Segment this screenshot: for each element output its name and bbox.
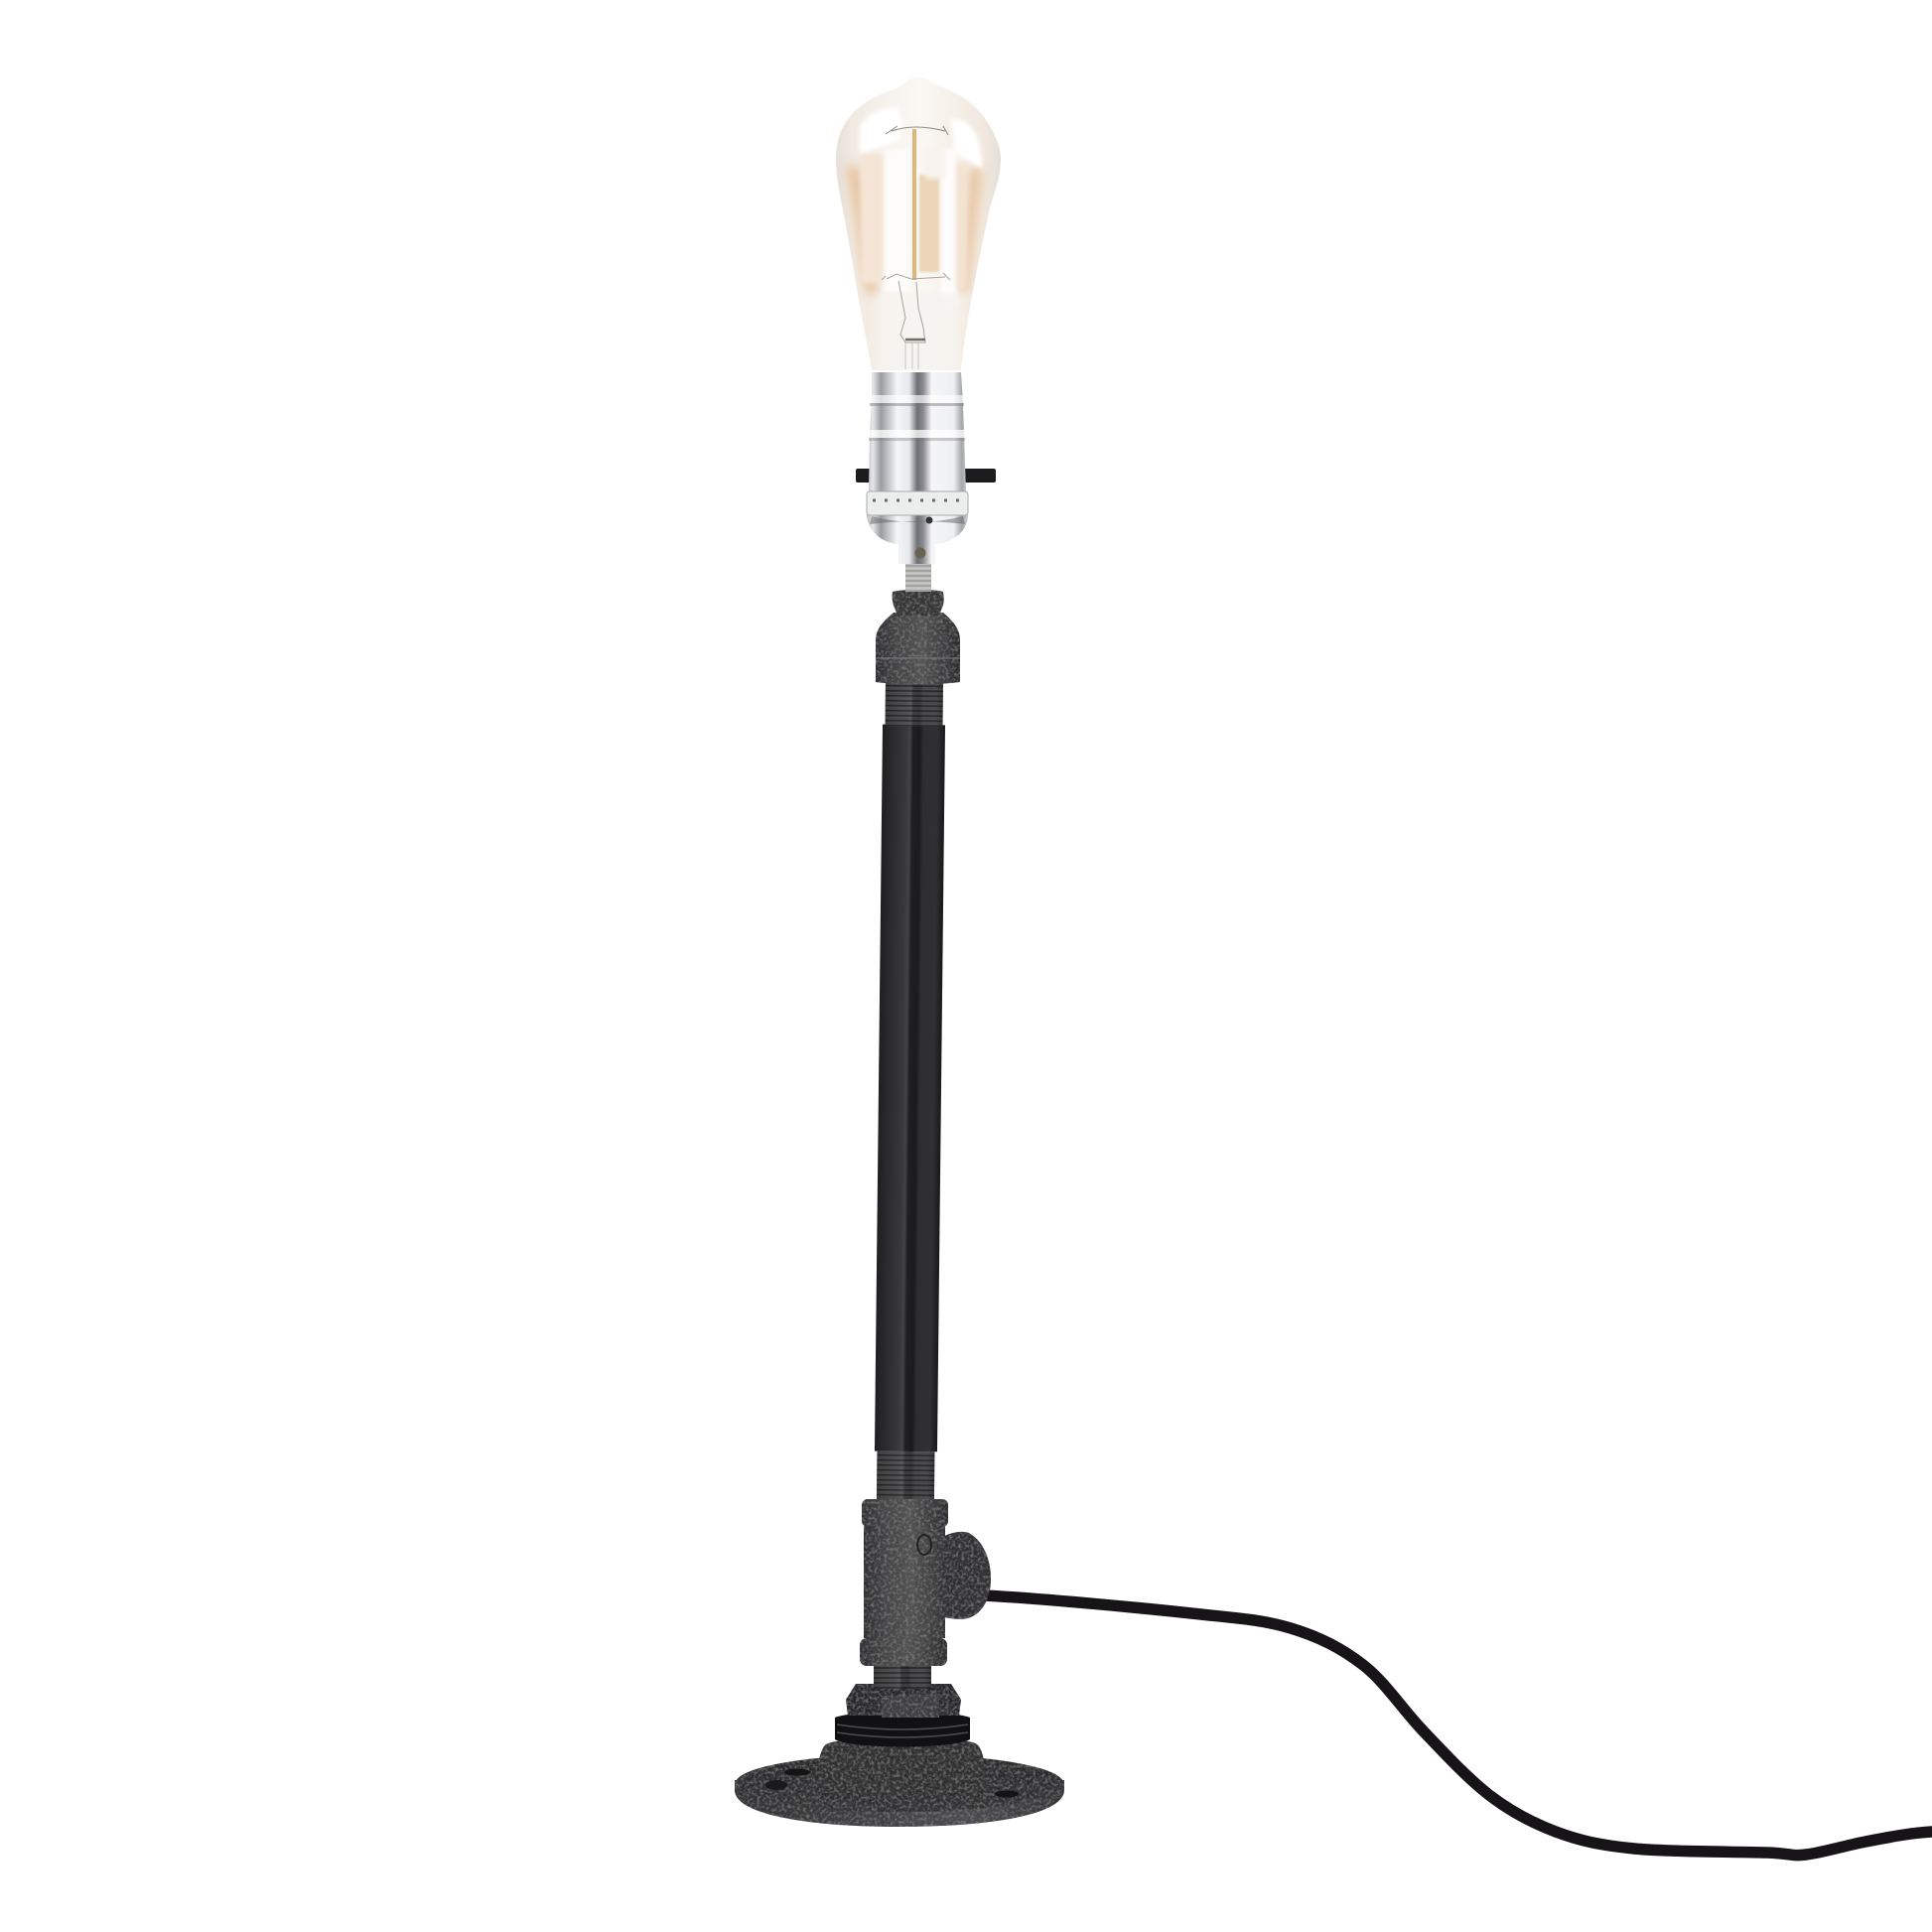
mounting holes [784,1769,1019,1797]
power cord [985,1595,1932,1856]
glass bulb [836,77,1001,372]
knurled ring [867,491,968,515]
set screw [915,548,925,558]
upper collar [862,1499,948,1527]
filament [882,126,950,369]
flange plate top [736,1754,1063,1812]
tee body [864,1526,951,1638]
hex nut [846,1684,961,1718]
flange plate edge [735,1780,1064,1827]
illustration: industrial pipe lamp with Edison bulb [735,77,1932,1861]
reducer coupling [876,590,960,684]
side outlet [938,1532,991,1619]
lamp socket [867,372,968,564]
threaded ring [835,1712,970,1747]
foundry mark [917,1535,931,1555]
threaded rod [905,562,931,592]
reducer cap [893,590,944,616]
lower collar [860,1638,947,1666]
switch knob right [959,469,996,483]
foundry mark on flange [765,1780,787,1790]
switch knob left [856,469,874,483]
lower nipple thread [874,1663,931,1689]
flange base [735,1684,1064,1827]
pipe stem [874,681,945,1503]
flange hub [817,1737,986,1803]
tee fitting [860,1499,991,1666]
